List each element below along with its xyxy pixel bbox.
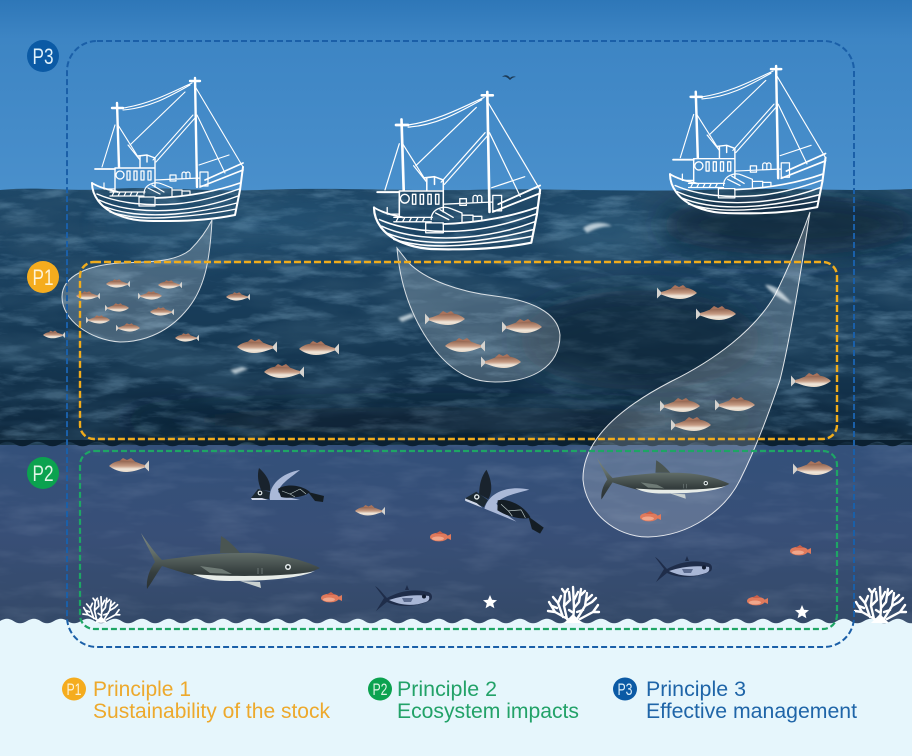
- P3 dashed boundary: [67, 41, 854, 647]
- turtle: right: [463, 466, 556, 534]
- legend: principle 2: [368, 678, 579, 723]
- legend: principle 3: P3: [618, 680, 632, 699]
- badge P3: P3: [32, 44, 54, 69]
- ocean surface: [0, 185, 912, 445]
- legend: principle 3: [613, 678, 857, 723]
- legend: principle 2: Ecosystem impacts: [397, 700, 579, 723]
- net: left boat: [62, 220, 212, 342]
- legend: principle 1: [62, 678, 330, 723]
- corals: [83, 587, 906, 623]
- badge P1: P1: [32, 265, 54, 290]
- badge P2: P2: [32, 461, 54, 486]
- legend: principle 3: Principle 3: [646, 678, 746, 701]
- legend: principle 2: Principle 2: [397, 678, 497, 701]
- fishing boat: centre: [374, 92, 540, 249]
- wave edge between surface and deep water: [0, 440, 912, 448]
- net: right boat: [583, 212, 810, 537]
- fishing boat: left: [92, 78, 243, 221]
- fishing boat: right: [670, 66, 826, 213]
- starfish: [483, 595, 809, 618]
- shark: large: [141, 533, 320, 589]
- P2 dashed boundary: [80, 451, 837, 629]
- net: centre boat: [397, 248, 560, 382]
- fish shoal: target stock: [43, 279, 831, 431]
- legend: principle 1: Sustainability of the stock: [93, 700, 330, 723]
- P1 dashed boundary: [80, 262, 837, 439]
- badge P1: [27, 261, 59, 293]
- seabed wave edge: [0, 617, 912, 625]
- legend: principle 3: Effective management: [646, 700, 857, 723]
- turtle: left: [251, 468, 324, 502]
- legend: principle 1: Principle 1: [93, 678, 191, 701]
- badge P2: [27, 457, 59, 489]
- shark: in net: [597, 458, 729, 499]
- tuna: [375, 556, 712, 611]
- sky: [0, 0, 912, 195]
- badge P3: [27, 40, 59, 72]
- legend: principle 1: P1: [66, 680, 82, 699]
- icon: seabird: [502, 75, 516, 80]
- deep water band: [0, 445, 912, 624]
- deep water fish: [109, 458, 833, 605]
- legend: principle 2: P2: [372, 680, 388, 699]
